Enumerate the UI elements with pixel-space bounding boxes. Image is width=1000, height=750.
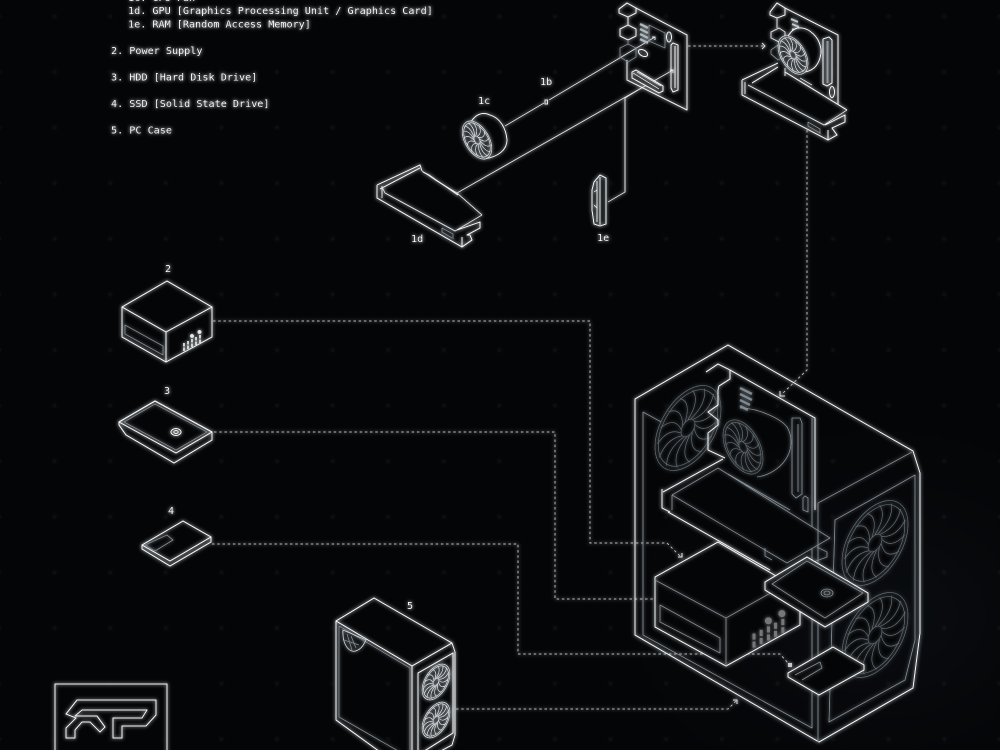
power supply (122, 281, 212, 362)
parts list text (111, 0, 433, 136)
hard disk drive (119, 401, 212, 463)
case CPU fan (723, 408, 791, 483)
label 1b: 1b (540, 77, 552, 88)
case fans (655, 371, 908, 692)
item 2 label: 2 (165, 264, 171, 275)
label 1d: 1d (411, 234, 423, 245)
label 1e: 1e (597, 233, 609, 244)
dashed connector: power supply to case (213, 321, 682, 557)
connector lines: exploded motherboard (457, 37, 673, 202)
parts list text: 1d. GPU [Graphics Processing Unit / Graphics Card] (128, 6, 433, 17)
label 1c: 1c (478, 96, 490, 107)
dashed arrow: assembly into case (780, 130, 807, 396)
PC case small (336, 598, 455, 750)
logo panel (55, 684, 167, 750)
parts list text: 5. PC Case (111, 126, 172, 136)
solid state drive (142, 521, 211, 566)
parts list text: 2. Power Supply (111, 46, 202, 57)
assembled motherboard (742, 3, 847, 140)
case inner panels (643, 412, 915, 728)
dashed connector: HDD to case (214, 432, 771, 602)
parts list text: 3. HDD [Hard Disk Drive] (111, 72, 257, 84)
RAM 1e (592, 175, 606, 226)
parts list text: 1e. RAM [Random Access Memory] (128, 20, 311, 30)
GPU 1d (377, 165, 482, 247)
dashed connector: case to final (456, 700, 737, 709)
case motherboard (706, 364, 815, 512)
case SSD (788, 647, 864, 695)
case PSU (655, 542, 800, 666)
dashed connector: SSD to case (212, 544, 792, 667)
parts list text: 4. SSD [Solid State Drive] (111, 99, 270, 110)
case side verticals (817, 503, 819, 742)
dashed arrow: assembly to next step (688, 43, 765, 49)
case HDD (765, 557, 868, 627)
logo mark (66, 700, 156, 738)
assembled PC case (635, 345, 920, 742)
item 5 label: 5 (407, 601, 413, 612)
item 3 label: 3 (164, 386, 170, 397)
CPU fan 1c (462, 113, 507, 166)
case outer shell (635, 345, 920, 742)
item 4 label: 4 (168, 506, 174, 517)
case GPU (662, 459, 830, 570)
motherboard 1a (619, 3, 687, 110)
